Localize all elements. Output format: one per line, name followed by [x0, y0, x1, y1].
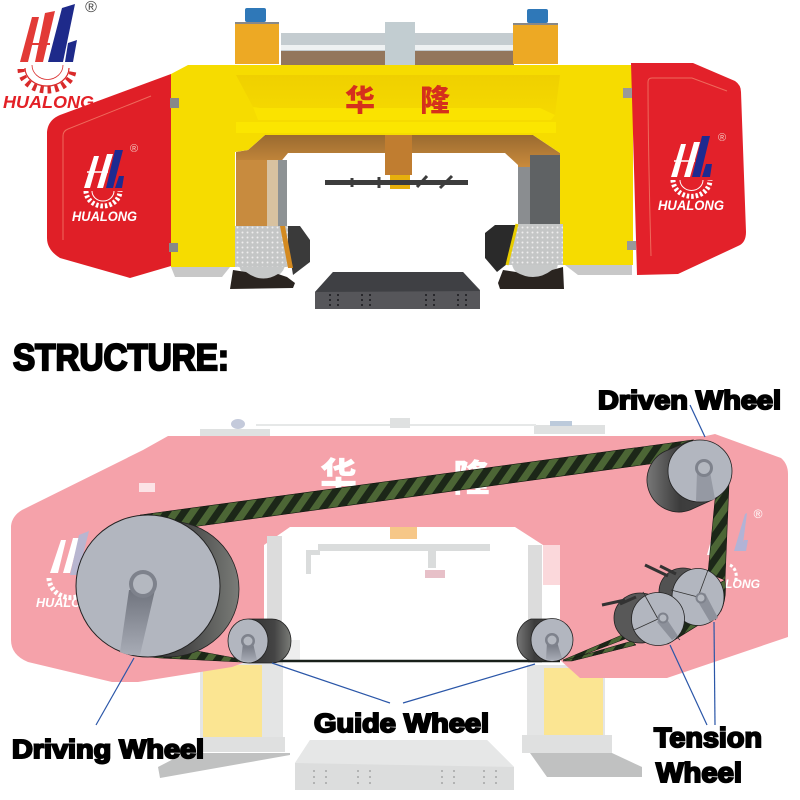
saw bar	[325, 176, 468, 188]
brand logo: HUALONG	[3, 92, 94, 112]
trays	[171, 267, 230, 277]
panel logo: HUALONG	[658, 198, 724, 213]
tension wheel back	[645, 565, 724, 626]
panel logo: ®	[718, 132, 726, 144]
yellow frame	[171, 65, 633, 267]
left red panel	[47, 74, 179, 278]
panel logo: ®	[130, 143, 138, 155]
label: tension wheel: Wheel	[656, 757, 742, 788]
driven wheel	[647, 440, 732, 512]
structure diagram	[11, 405, 788, 790]
saw hanger	[385, 135, 412, 175]
right wheel guard	[485, 224, 564, 289]
ghost left logo: HUALO	[36, 595, 81, 610]
ghost orange unit	[390, 527, 417, 539]
ghost chinese title: 隆	[453, 458, 490, 499]
ghost columns and base	[158, 660, 642, 778]
heading: structure: STRUCTURE:	[13, 337, 229, 378]
top gantry	[235, 8, 558, 65]
label: guide wheel: Guide Wheel	[314, 708, 489, 738]
ghost gantry	[200, 418, 605, 437]
panel logo	[658, 132, 726, 213]
ghost right logo: LONG	[725, 577, 760, 591]
guide wheel right	[517, 618, 573, 662]
brand logo	[3, 0, 97, 112]
right red panel	[623, 63, 746, 275]
machine photo	[47, 8, 746, 309]
ghost right logo: ®	[754, 507, 763, 521]
pink frame	[11, 434, 788, 682]
underside and inner columns	[236, 135, 560, 226]
label: tension wheel: Tension	[654, 722, 762, 753]
icon: blue motors	[245, 8, 548, 23]
pale column strips	[267, 536, 560, 663]
label: tension wheel	[654, 722, 762, 788]
chinese title on beam	[345, 85, 450, 118]
tension wheel front	[602, 592, 684, 646]
label: driven wheel: Driven Wheel	[598, 385, 781, 415]
leader lines	[96, 405, 715, 725]
ghost slab	[295, 740, 514, 790]
saw belt	[140, 440, 729, 662]
driving wheel	[76, 515, 239, 657]
ghost right logo	[707, 507, 763, 591]
label: driving wheel: Driving Wheel	[12, 734, 204, 764]
panel logo: HUALONG	[72, 209, 137, 224]
stone slab	[315, 272, 480, 309]
guide wheel left	[228, 619, 291, 663]
ghost chinese title	[320, 456, 490, 499]
ghost left logo	[36, 483, 155, 610]
chinese title on beam: 隆	[420, 85, 450, 118]
left wheel guard	[230, 226, 310, 289]
ghost saw bar	[306, 544, 490, 578]
ghost chinese title: 华	[320, 456, 357, 497]
panel logo	[72, 143, 138, 224]
chinese title on beam: 华	[345, 85, 375, 118]
